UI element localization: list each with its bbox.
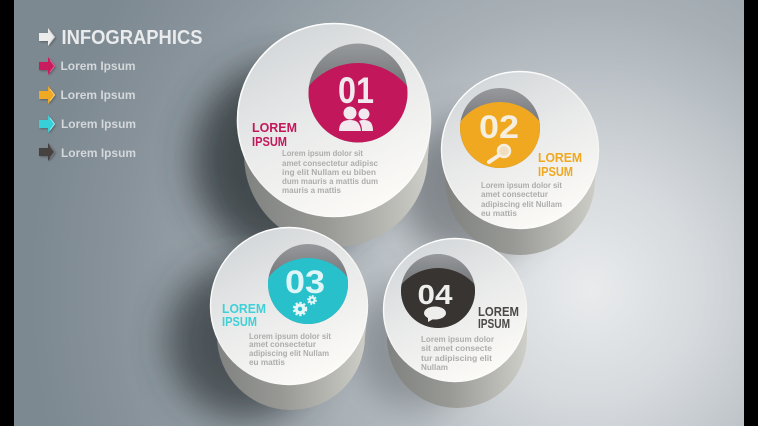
body text: eu mattis (481, 209, 517, 218)
icon: dark arrow (39, 143, 55, 161)
top face (442, 72, 598, 228)
hole (460, 88, 540, 168)
cylinder side (385, 315, 527, 408)
hole (308, 44, 408, 142)
cylinder side (442, 155, 598, 255)
legend item 2: Lorem Ipsum (60, 88, 136, 102)
cylinder 01 (238, 24, 431, 247)
top face (384, 238, 526, 382)
cast shadows (167, 62, 540, 420)
icon: orange arrow (39, 86, 55, 104)
number: 01 (338, 70, 374, 111)
icon: white arrow (39, 28, 55, 46)
icon: pink arrow (39, 57, 55, 75)
legend item 4: Lorem Ipsum (61, 146, 136, 160)
cylinder 03 (210, 228, 368, 410)
icon: people (339, 106, 373, 131)
heading: IPSUM (538, 164, 573, 179)
body text: adipiscing elit Nullam (249, 349, 329, 358)
number: 04 (418, 279, 453, 310)
legend item 1: Lorem Ipsum (60, 59, 136, 73)
icon: speech bubble (424, 306, 446, 322)
body text: eu mattis (249, 358, 285, 367)
top face (238, 24, 430, 216)
body text: dum mauris a mattis dum (282, 176, 378, 186)
body text: ing elit Nullam eu biben (282, 167, 376, 177)
heading: LOREM (252, 120, 297, 135)
body text: amet consectetur (249, 340, 317, 349)
body text: sit amet consecte (421, 344, 492, 353)
number: 02 (479, 109, 519, 145)
cylinder 04 (384, 238, 527, 408)
legend item 3: Lorem Ipsum (61, 117, 136, 131)
body text: amet consectetur (481, 190, 549, 199)
legend (39, 26, 202, 161)
body text: Nullam (421, 363, 448, 372)
heading: IPSUM (478, 316, 510, 331)
legend title: INFOGRAPHICS (62, 26, 202, 49)
hole (401, 254, 475, 328)
body text: mauris a mattis (282, 185, 341, 195)
icon: magnifier (489, 145, 510, 162)
cylinder side (239, 125, 431, 247)
heading: IPSUM (222, 314, 257, 329)
cylinder side (212, 310, 368, 410)
icon: cyan arrow (39, 115, 55, 133)
heading: LOREM (222, 301, 266, 316)
heading: IPSUM (252, 134, 287, 149)
body text: Lorem ipsum dolor (421, 335, 495, 344)
body text: tur adipiscing elit (421, 354, 492, 363)
top face (210, 228, 368, 384)
cylinder 02 (442, 72, 598, 255)
body text: amet consectetur adipisc (282, 158, 378, 168)
heading: LOREM (478, 304, 519, 319)
body text: Lorem ipsum dolor sit (282, 148, 363, 158)
body text: Lorem ipsum dolor sit (249, 332, 331, 341)
hole (268, 244, 348, 324)
body text: Lorem ipsum dolor sit (481, 181, 562, 190)
number: 03 (285, 264, 325, 300)
heading: LOREM (538, 150, 582, 165)
body text: adipiscing elit Nullam (481, 200, 562, 209)
icon: gears (294, 296, 316, 314)
